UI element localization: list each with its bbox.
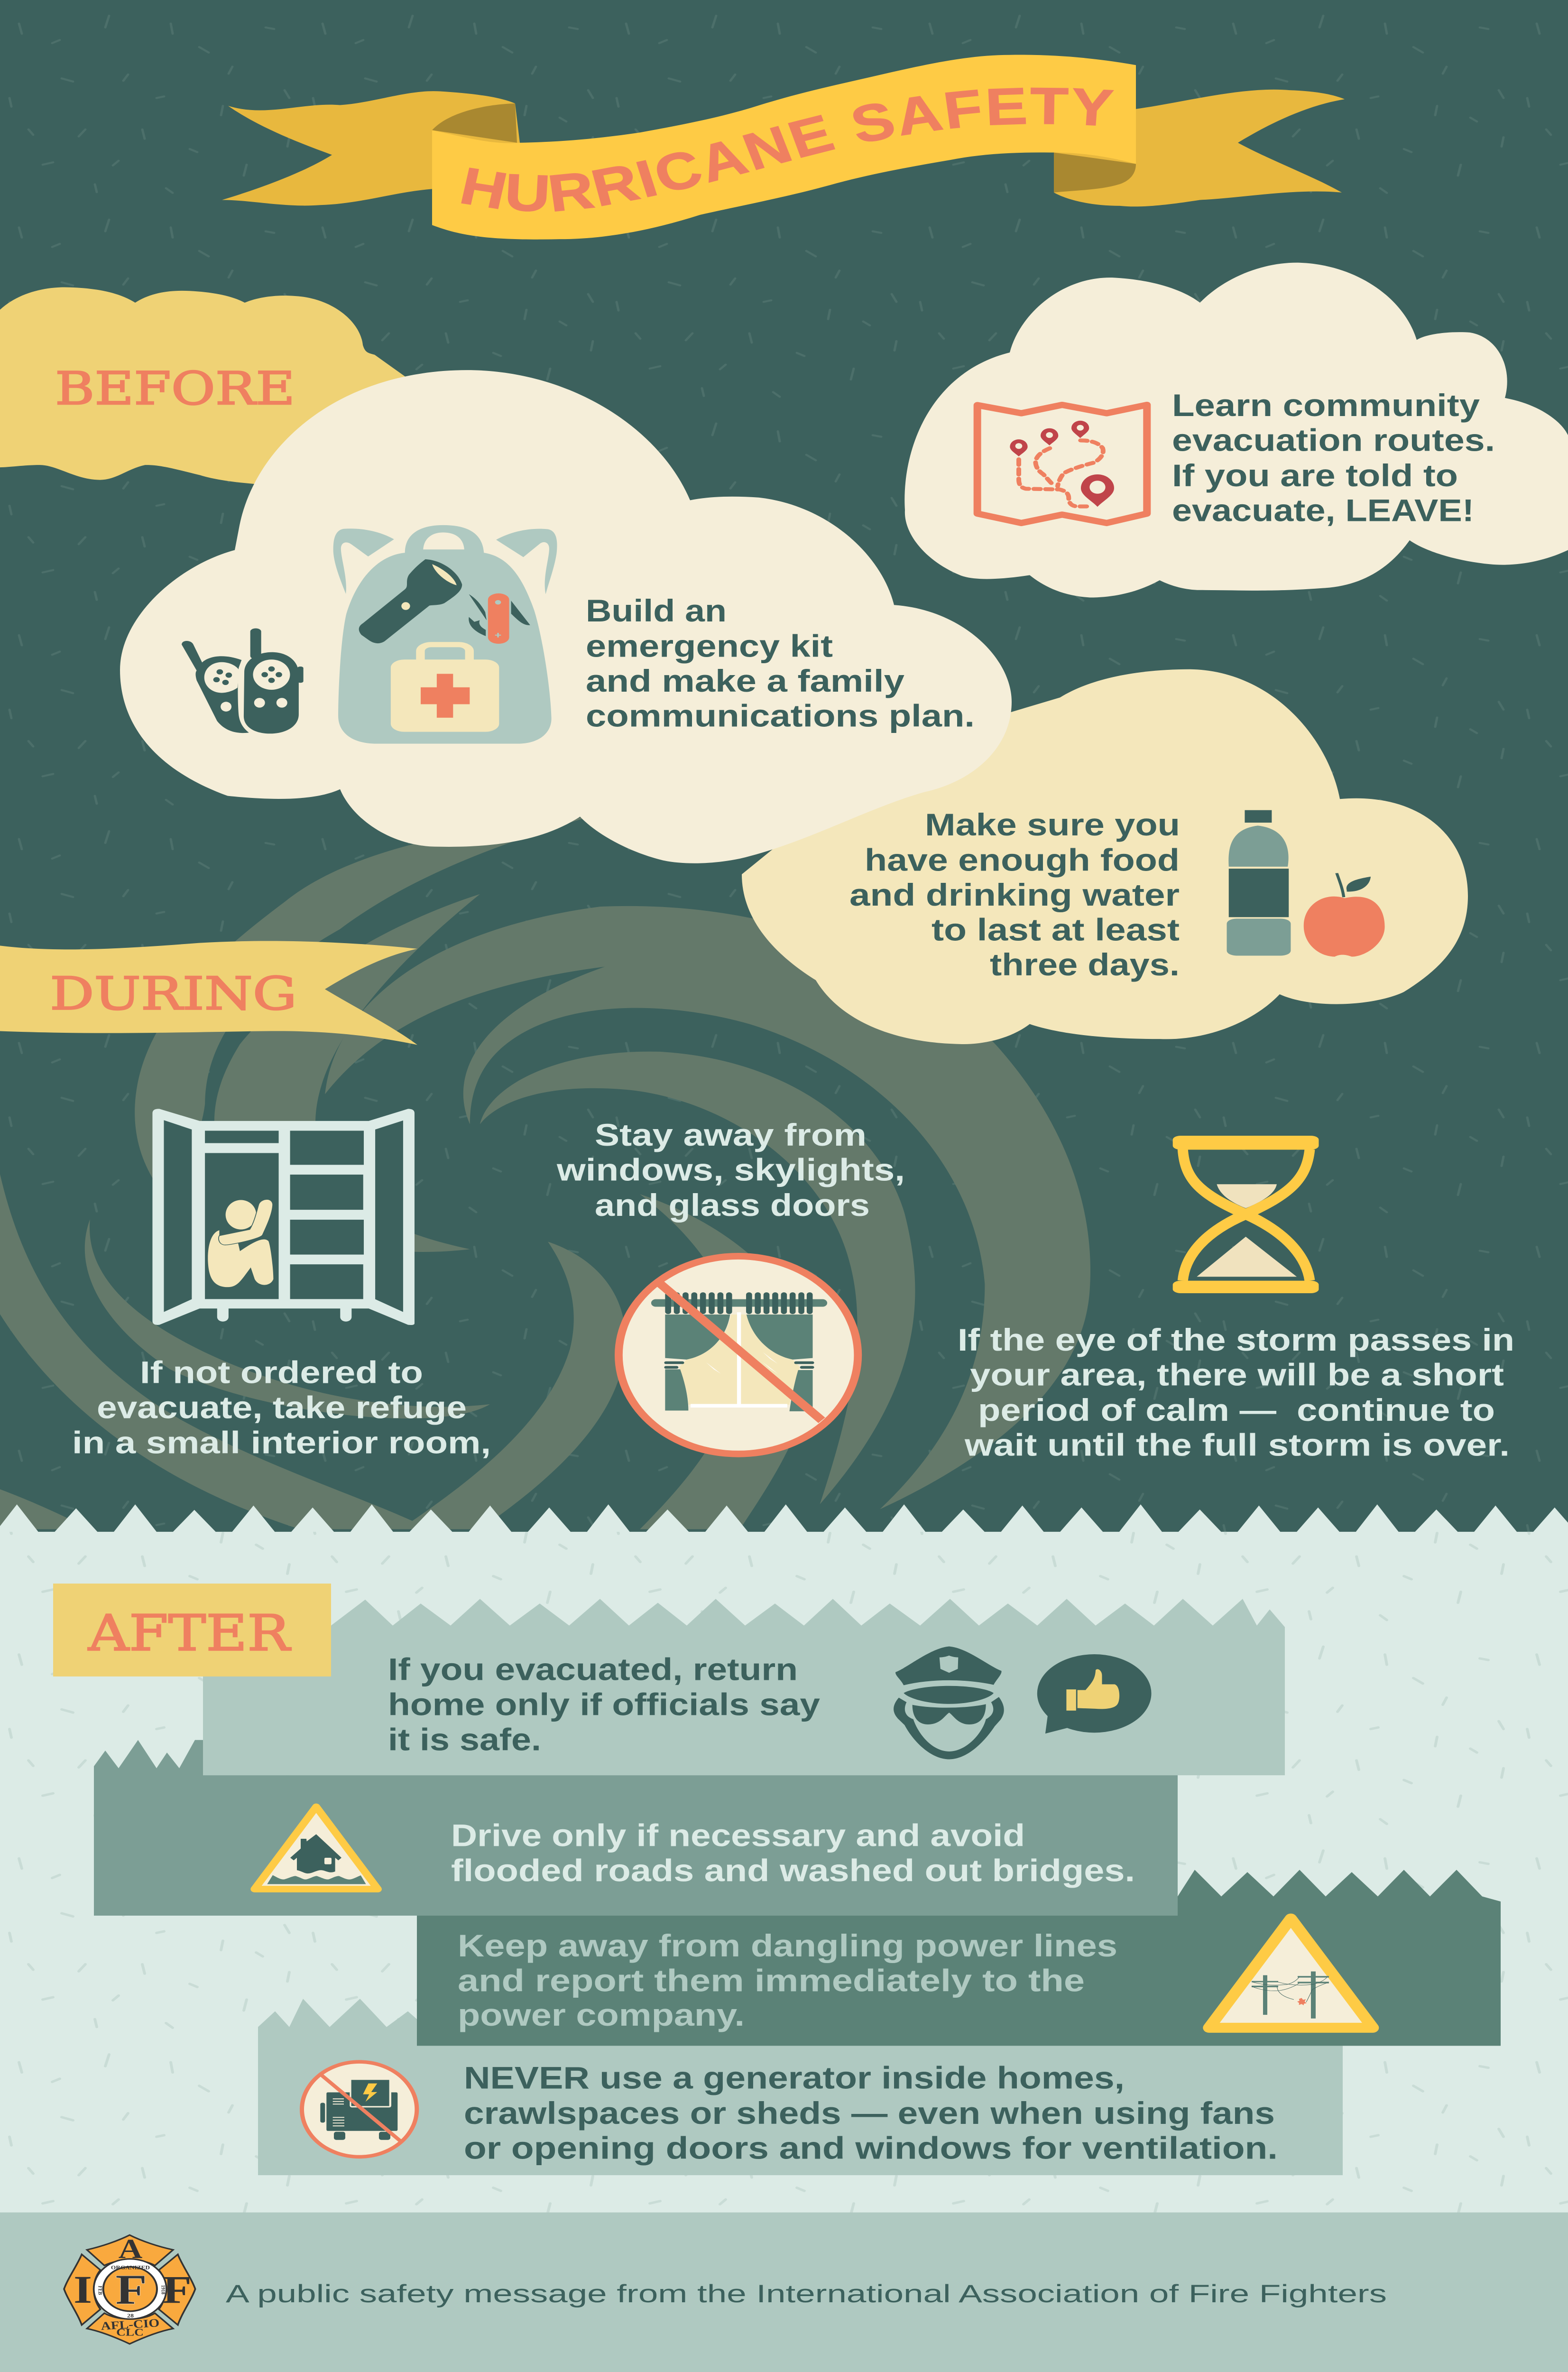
text: eye of the storm: your area, there will be a short: [970, 1357, 1504, 1392]
icon: downed power line warning sign: [1209, 1918, 1373, 2028]
ribbon right fold: [1054, 152, 1136, 193]
text: eye of the storm: period of calm — continue to: [978, 1393, 1495, 1427]
text: power lines: and report them immediately to the: [458, 1963, 1085, 1998]
icon: no generator sign: [300, 2060, 419, 2159]
text: emergency kit: Build an: [586, 593, 727, 628]
panel: evacuation routes cloud: [904, 263, 1568, 598]
title text: HURRICANE SAFETY: [455, 76, 1117, 222]
text: emergency kit: communications plan.: [586, 698, 975, 733]
ribbon main band: [432, 55, 1136, 240]
text: emergency kit: and make a family: [586, 663, 904, 698]
icon: police officer: [894, 1647, 1004, 1760]
text: food and water: Make sure you: [925, 807, 1180, 843]
panel: return home: [203, 1599, 1285, 1775]
ribbon left fold: [432, 103, 517, 143]
during: eye of the storm: [958, 1136, 1525, 1463]
text: generator warning: crawlspaces or sheds — even when using fans: [464, 2095, 1275, 2131]
icon: flooded house warning sign: [255, 1807, 378, 1889]
text: food and water: and drinking water: [849, 878, 1180, 913]
text: return home: it is safe.: [388, 1722, 541, 1757]
icon: IAFF Maltese cross logo: F: [116, 2266, 147, 2313]
icon: map with route pins: [978, 405, 1147, 523]
icon: no windows sign with curtains: [615, 1253, 862, 1457]
panel: food and water cloud: [742, 669, 1468, 1044]
text: evacuation routes: Learn community: [1172, 388, 1480, 423]
text: evacuation routes: evacuate, LEAVE!: [1172, 493, 1474, 528]
ribbon right tail: [1054, 90, 1345, 206]
icon: IAFF Maltese cross logo: 1918: [160, 2285, 166, 2295]
icon: IAFF Maltese cross logo: A: [119, 2233, 142, 2264]
panel: generator: [258, 1999, 1343, 2175]
text: evacuation routes: evacuation routes.: [1172, 423, 1495, 458]
icon: IAFF Maltese cross logo: ORGANIZED: [111, 2265, 150, 2270]
icon: IAFF Maltese cross logo: FEB: [97, 2286, 103, 2295]
icon: apple: [1304, 873, 1385, 957]
text: footer message: A public safety message from the International Association of Fire Fighters: [226, 2280, 1387, 2308]
text: food and water: to last at least: [932, 912, 1180, 947]
text: generator warning: or opening doors and windows for ventilation.: [464, 2131, 1278, 2166]
text: interior room: If not ordered to: [140, 1355, 423, 1390]
text: driving: flooded roads and washed out bridges.: [451, 1853, 1135, 1888]
heading: AFTER: AFTER: [88, 1605, 291, 1662]
text: driving: Drive only if necessary and avoid: [451, 1818, 1025, 1853]
text: stay away from windows: and glass doors: [595, 1187, 870, 1223]
heading: DURING: DURING: [50, 967, 297, 1020]
text: emergency kit: emergency kit: [586, 629, 833, 664]
during: stay away from windows: [556, 1117, 915, 1457]
text: stay away from windows: Stay away from: [595, 1117, 867, 1152]
text: stay away from windows: windows, skylights,: [556, 1152, 905, 1187]
text: return home: If you evacuated, return: [388, 1652, 798, 1687]
icon: water bottle: [1227, 810, 1291, 955]
icon: closet with sheltering person: [152, 1109, 415, 1325]
text: interior room: in a small interior room,: [72, 1425, 491, 1460]
heading: BEFORE: BEFORE: [55, 362, 295, 415]
panel: DURING heading banner: [0, 941, 417, 1045]
icon: IAFF Maltese cross logo: F: [163, 2268, 192, 2311]
text: return home: home only if officials say: [388, 1687, 820, 1722]
icon: thumbs up speech bubble: [1037, 1654, 1152, 1733]
icon: walkie talkies: [182, 628, 304, 733]
icon: IAFF Maltese cross logo: AFL-CIO: [100, 2316, 160, 2333]
text: interior room: evacuate, take refuge: [97, 1390, 467, 1425]
text: power lines: Keep away from dangling power lines: [458, 1928, 1117, 1963]
title ribbon: [222, 55, 1345, 240]
text: power lines: power company.: [458, 1998, 745, 2033]
panel: AFTER heading box: [53, 1584, 331, 1677]
text: eye of the storm: If the eye of the storm passes in: [958, 1323, 1514, 1358]
text: food and water: have enough food: [865, 843, 1180, 878]
text: generator warning: NEVER use a generator inside homes,: [464, 2060, 1125, 2095]
background: dark teal sky: [0, 0, 1568, 1537]
after section: light background with jagged top edge: [0, 1504, 1568, 2215]
icon: IAFF Maltese cross logo: [64, 2233, 195, 2344]
panel: power lines: [417, 1870, 1501, 2046]
text: food and water: three days.: [990, 947, 1180, 982]
text: eye of the storm: wait until the full storm is over.: [964, 1427, 1510, 1463]
hurricane swirl: [0, 816, 1090, 1529]
footer band: [0, 2213, 1568, 2372]
icon: hourglass: [1173, 1136, 1319, 1293]
icon: IAFF Maltese cross logo: 28: [127, 2313, 134, 2319]
during: interior room: [72, 1109, 491, 1460]
icon: IAFF Maltese cross logo: I: [74, 2268, 92, 2311]
panel: emergency kit cloud: [120, 370, 1012, 863]
panel: driving: [94, 1740, 1178, 1916]
text: evacuation routes: If you are told to: [1172, 458, 1458, 493]
icon: backpack with flashlight, knife and first aid kit: [333, 525, 557, 744]
icon: IAFF Maltese cross logo: CLC: [116, 2326, 144, 2338]
panel: BEFORE heading cloud: [0, 287, 427, 486]
ribbon left tail: [222, 91, 520, 205]
